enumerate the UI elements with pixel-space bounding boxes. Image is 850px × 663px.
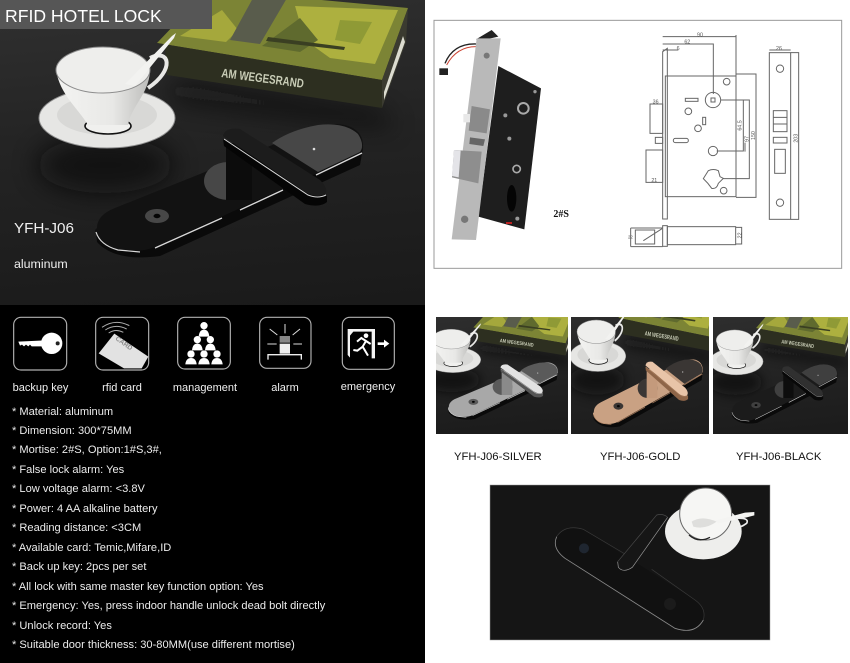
specification list: * Back up key: 2pcs per set <box>12 561 146 573</box>
panel: specification panel <box>0 305 425 663</box>
dimension labels: 203 <box>794 134 800 143</box>
photo: cup, saucer and book on dark table <box>0 0 425 305</box>
photo: black lock option: AM WEGESRAND <box>781 339 815 350</box>
photo: lock from above <box>490 485 770 640</box>
icon: backup key <box>14 317 67 370</box>
icon labels <box>13 381 396 394</box>
dimension labels: 26 <box>776 46 782 52</box>
material label: aluminum <box>14 257 68 271</box>
specification list: * Available card: Temic,Mifare,ID <box>12 542 171 554</box>
specification list: * False lock alarm: Yes <box>12 464 125 476</box>
book title: AM WEGESRAND <box>221 66 305 91</box>
icon labels: backup key <box>13 382 69 394</box>
lock plate <box>555 528 704 630</box>
photo: black lock option <box>713 317 848 434</box>
colour option captions <box>454 451 822 463</box>
colour option captions: YFH-J06-GOLD <box>600 451 680 463</box>
dimension labels: 6 <box>677 46 680 52</box>
specification list: * Dimension: 300*75MM <box>12 425 132 437</box>
technical drawing: top view <box>631 226 742 247</box>
photo: gold lock option: AM WEGESRAND <box>644 331 679 343</box>
specification list: * Material: aluminum <box>12 406 113 418</box>
specification list: * Power: 4 AA alkaline battery <box>12 503 158 515</box>
panel: mortise diagram <box>434 20 842 268</box>
icon: rfid card: CARD <box>114 335 134 352</box>
colour option captions: YFH-J06-BLACK <box>736 451 822 463</box>
dimension labels: 22 <box>628 235 633 240</box>
dimension labels: 62 <box>684 39 690 45</box>
technical drawing: faceplate <box>769 50 799 219</box>
dimension labels: 97 <box>744 136 750 142</box>
photo: black door lock <box>95 124 363 257</box>
technical drawing: side view <box>646 35 756 219</box>
specification list: * Mortise: 2#S, Option:1#S,3#, <box>12 444 162 456</box>
colour option captions: YFH-J06-SILVER <box>454 451 542 463</box>
icon labels: alarm <box>271 382 299 394</box>
model number: YFH-J06 <box>14 220 74 237</box>
icon: emergency exit <box>342 317 394 369</box>
icon: rfid card <box>96 317 149 370</box>
lock model label: 2#S <box>553 209 569 220</box>
icon labels: emergency <box>341 381 396 393</box>
photo: mortise lock body <box>439 30 541 240</box>
icon labels: management <box>173 382 237 394</box>
dimension labels: 36 <box>653 100 659 106</box>
lever handle <box>618 515 668 570</box>
dimension labels: 150 <box>751 131 757 140</box>
dimension labels: 21 <box>651 178 657 184</box>
specification list: * Reading distance: <3CM <box>12 522 141 534</box>
icon labels: rfid card <box>102 382 142 394</box>
dimension labels: 22 <box>737 232 743 238</box>
specification list: * All lock with same master key function option: Yes <box>12 581 264 593</box>
specification list: * Suitable door thickness: 30-80MM(use different mortise) <box>12 639 295 651</box>
photo: gold lock option <box>571 317 709 434</box>
icon row <box>14 317 394 370</box>
title band: RFID HOTEL LOCK <box>5 6 162 26</box>
title band <box>0 0 212 29</box>
dimension labels <box>628 33 800 240</box>
dimension labels: 64.5 <box>738 120 744 131</box>
saucer and cup <box>665 488 754 559</box>
specification list <box>12 406 326 651</box>
photo: silver lock option: AM WEGESRAND <box>499 338 534 349</box>
specification list: * Emergency: Yes, press indoor handle unlock dead bolt directly <box>12 600 326 612</box>
specification list: * Low voltage alarm: <3.8V <box>12 483 145 495</box>
specification list: * Unlock record: Yes <box>12 620 112 632</box>
icon: alarm <box>260 317 311 368</box>
panel: main product photo <box>0 0 425 305</box>
icon: management hierarchy <box>178 317 230 369</box>
photo: silver lock option <box>436 317 568 434</box>
dimension labels: 90 <box>697 33 703 39</box>
